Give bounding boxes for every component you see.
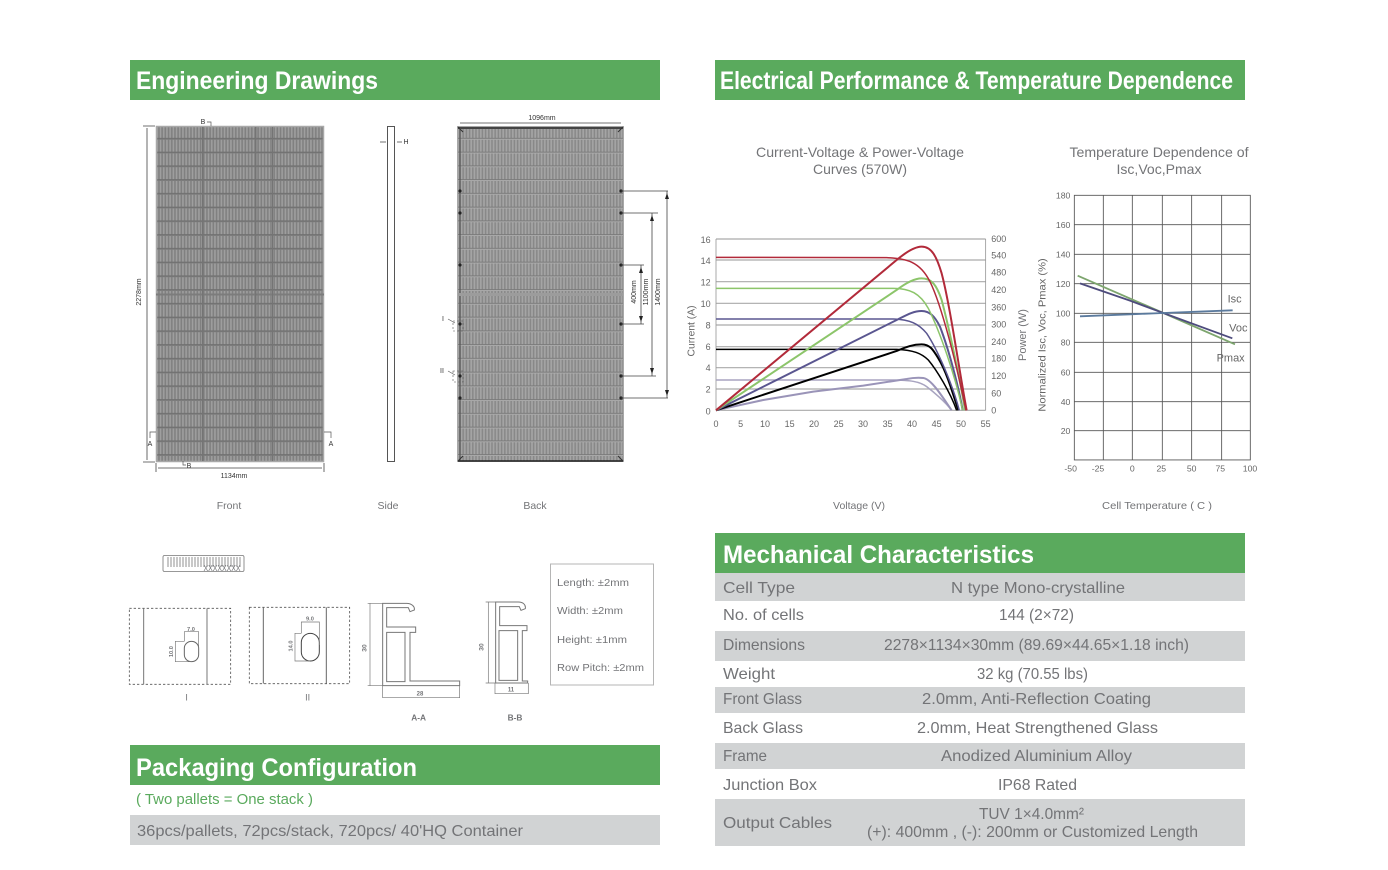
- line chart: I-V and P-V curves: 0: [991, 406, 996, 416]
- row: front glass: [715, 687, 1245, 713]
- heading: Engineering Drawings: [130, 60, 660, 100]
- drawing: frame section B-B: B-B: [508, 712, 522, 722]
- line chart: I-V and P-V curves: Current (A): [687, 305, 698, 357]
- drawing: side view of module: H: [403, 139, 409, 146]
- callout: tolerances: Length: ±2mm: [557, 577, 629, 589]
- row: junction box: [723, 777, 1077, 794]
- line chart: temperature dependence of Isc, Voc, Pmax: 25: [1156, 464, 1166, 474]
- drawing: back view of module: 1100mm: [643, 278, 650, 305]
- line chart: I-V and P-V curves: 2: [706, 385, 711, 395]
- axis label: Power (W): Power (W): [1017, 309, 1029, 361]
- line chart: temperature dependence of Isc, Voc, Pmax: 40: [1061, 397, 1071, 407]
- packaging details row: [130, 815, 660, 845]
- drawing: hole detail II: II: [305, 692, 310, 702]
- row: dimensions: [715, 631, 1245, 661]
- row: back glass: Back Glass: [723, 720, 803, 737]
- line chart: I-V and P-V curves: 16: [701, 235, 711, 245]
- line chart: I-V and P-V curves: 35: [883, 419, 893, 429]
- line chart: I-V and P-V curves: 10: [701, 299, 711, 309]
- line chart: temperature dependence of Isc, Voc, Pmax: 50: [1187, 464, 1197, 474]
- heading: Mechanical Characteristics: [715, 533, 1245, 573]
- line chart: temperature dependence of Isc, Voc, Pmax: [1037, 191, 1257, 474]
- axis label: Voltage (V): Voltage (V): [833, 500, 885, 512]
- line chart: temperature dependence of Isc, Voc, Pmax: Pmax: [1217, 352, 1245, 364]
- drawing: front view of module: A: [148, 441, 153, 448]
- view labels: Front, Side, Back: Front: [217, 500, 241, 512]
- line chart: I-V and P-V curves: 6: [706, 342, 711, 352]
- drawing: frame section A-A: [361, 603, 460, 722]
- chart title: current-voltage and power-voltage curves: Curves (570W): [813, 161, 907, 177]
- table: mechanical characteristics: [715, 573, 1245, 846]
- drawing: front view of module: B: [187, 463, 192, 470]
- line chart: temperature dependence of Isc, Voc, Pmax: -25: [1092, 464, 1104, 474]
- row: back glass: 2.0mm, Heat Strengthened Glass: [917, 720, 1158, 737]
- row: weight: [723, 666, 1088, 683]
- line chart: I-V and P-V curves: 40: [907, 419, 917, 429]
- drawing: back view of module: 1400mm: [655, 278, 662, 306]
- row: front glass: 2.0mm, Anti-Reflection Coating: [922, 691, 1151, 708]
- drawing: hole detail I: 7.0: [187, 627, 195, 633]
- drawing: junction strip detail: XXXXXXXX: [204, 564, 241, 573]
- drawing: junction strip detail: [163, 556, 244, 573]
- line chart: temperature dependence of Isc, Voc, Pmax: 140: [1056, 250, 1071, 260]
- line chart: temperature dependence of Isc, Voc, Pmax: 180: [1056, 191, 1071, 201]
- drawing: frame section B-B: [479, 602, 528, 722]
- line chart: I-V and P-V curves: 50: [956, 419, 966, 429]
- drawing: back view of module: [440, 115, 669, 462]
- line chart: I-V and P-V curves: 600: [991, 234, 1006, 244]
- line chart: temperature dependence of Isc, Voc, Pmax: 0: [1130, 464, 1135, 474]
- row: weight: Weight: [723, 666, 776, 683]
- view labels: Front, Side, Back: Back: [523, 500, 547, 512]
- drawing: front view of module: 1134mm: [221, 473, 248, 480]
- drawing: back view of module: 1096mm: [528, 115, 556, 122]
- drawing: hole detail I: 10.0: [169, 646, 175, 657]
- line chart: temperature dependence of Isc, Voc, Pmax: Voc: [1229, 322, 1248, 334]
- line chart: I-V and P-V curves: 5: [738, 419, 743, 429]
- line chart: I-V and P-V curves: 360: [991, 303, 1006, 313]
- drawing: side view of module: [380, 126, 409, 462]
- callout: tolerances: [550, 564, 654, 685]
- view labels: Front, Side, Back: [217, 500, 547, 512]
- line chart: I-V and P-V curves: 0: [706, 406, 711, 416]
- line chart: I-V and P-V curves: 55: [981, 419, 991, 429]
- line chart: I-V and P-V curves: 4: [706, 363, 711, 373]
- chart title: temperature dependence: Isc,Voc,Pmax: [1116, 161, 1202, 177]
- line chart: I-V and P-V curves: 12: [701, 277, 711, 287]
- line chart: I-V and P-V curves: 8: [706, 320, 711, 330]
- drawing: back view of module: I: [442, 316, 444, 323]
- drawing: hole detail I: [129, 608, 231, 702]
- line chart: temperature dependence of Isc, Voc, Pmax: 60: [1061, 368, 1071, 378]
- chart title: current-voltage and power-voltage curves: Current-Voltage & Power-Voltage: [756, 144, 964, 160]
- row: output cables: [715, 799, 1245, 846]
- drawing: frame section A-A: 30: [361, 644, 368, 652]
- text: two pallets note: ( Two pallets = One stack ): [136, 792, 313, 808]
- row: junction box: IP68 Rated: [998, 777, 1077, 794]
- line chart: I-V and P-V curves: 60: [991, 388, 1001, 398]
- line chart: I-V and P-V curves: 480: [991, 268, 1006, 278]
- line chart: I-V and P-V curves: 15: [785, 419, 795, 429]
- drawing: hole detail I: I: [185, 692, 188, 702]
- row: junction box: Junction Box: [723, 777, 817, 794]
- drawing: back view of module: II: [440, 368, 444, 375]
- line chart: temperature dependence of Isc, Voc, Pmax: 20: [1061, 426, 1071, 436]
- row: output cables: Output Cables: [723, 815, 832, 832]
- drawing: frame section A-A: A-A: [411, 712, 426, 722]
- callout: tolerances: Height: ±1mm: [557, 634, 627, 646]
- line chart: temperature dependence of Isc, Voc, Pmax: 100: [1056, 309, 1071, 319]
- row: dimensions: Dimensions: [723, 637, 805, 654]
- line chart: temperature dependence of Isc, Voc, Pmax: -50: [1064, 464, 1077, 474]
- drawing: hole detail II: 9.0: [306, 617, 314, 623]
- chart title: temperature dependence: [1070, 144, 1249, 177]
- heading: Electrical Performance & Temperature Dependence: [715, 60, 1245, 100]
- row: output cables: (+): 400mm , (-): 200mm or Customized Length: [867, 824, 1198, 841]
- row: back glass: [723, 720, 1158, 737]
- line chart: temperature dependence of Isc, Voc, Pmax: 100: [1243, 464, 1257, 474]
- packaging details row: 36pcs/pallets, 72pcs/stack, 720pcs/ 40'HQ Container: [137, 823, 524, 840]
- line chart: temperature dependence of Isc, Voc, Pmax: 120: [1056, 279, 1071, 289]
- line chart: I-V and P-V curves: 25: [834, 419, 844, 429]
- line chart: I-V and P-V curves: 540: [991, 250, 1006, 260]
- axis label: Cell Temperature: Cell Temperature ( C ): [1102, 500, 1212, 512]
- row: frame: [715, 743, 1245, 769]
- line chart: temperature dependence of Isc, Voc, Pmax: 160: [1056, 220, 1071, 230]
- chart title: temperature dependence: Temperature Dependence of: [1070, 144, 1249, 160]
- line chart: I-V and P-V curves: 14: [701, 256, 711, 266]
- line chart: I-V and P-V curves: 30: [858, 419, 868, 429]
- row: cell type: Cell Type: [723, 580, 795, 597]
- row: frame: Anodized Aluminium Alloy: [941, 748, 1132, 765]
- line chart: I-V and P-V curves: 300: [991, 320, 1006, 330]
- heading: Electrical Performance & Temperature Dependence: Electrical Performance & Temperature Dependence: [720, 67, 1233, 95]
- drawing: front view of module: 2278mm: [136, 278, 143, 306]
- line chart: I-V and P-V curves: 120: [991, 371, 1006, 381]
- line chart: I-V and P-V curves: 20: [809, 419, 819, 429]
- line chart: I-V and P-V curves: 420: [991, 285, 1006, 295]
- row: frame: Frame: [723, 748, 767, 765]
- drawing: front view of module: B: [201, 119, 206, 126]
- row: number of cells: [723, 607, 1074, 624]
- heading: Mechanical Characteristics: Mechanical Characteristics: [723, 541, 1034, 569]
- line chart: I-V and P-V curves: 240: [991, 337, 1006, 347]
- heading: Engineering Drawings: Engineering Drawings: [136, 67, 378, 95]
- line chart: I-V and P-V curves: 10: [760, 419, 770, 429]
- row: number of cells: 144 (2×72): [999, 607, 1074, 624]
- drawing: front view of module: [136, 119, 334, 480]
- row: number of cells: No. of cells: [723, 607, 804, 624]
- chart title: current-voltage and power-voltage curves: [756, 144, 964, 177]
- line chart: temperature dependence of Isc, Voc, Pmax: 80: [1061, 338, 1071, 348]
- line chart: temperature dependence of Isc, Voc, Pmax: Normalized Isc, Voc, Pmax (%): [1037, 258, 1048, 412]
- view labels: Front, Side, Back: Side: [377, 500, 399, 512]
- line chart: I-V and P-V curves: 180: [991, 354, 1006, 364]
- line chart: I-V and P-V curves: 0: [713, 419, 718, 429]
- drawing: back view of module: 400mm: [631, 280, 638, 304]
- row: output cables: TUV 1×4.0mm²: [979, 806, 1085, 823]
- drawing: hole detail II: 14.0: [288, 640, 294, 651]
- callout: tolerances: Width: ±2mm: [557, 605, 623, 617]
- drawing: frame section A-A: 28: [417, 692, 424, 698]
- line chart: I-V and P-V curves: [687, 234, 1006, 429]
- heading: Packaging Configuration: [130, 745, 660, 785]
- line chart: temperature dependence of Isc, Voc, Pmax: Isc: [1228, 293, 1242, 305]
- heading: Packaging Configuration: Packaging Configuration: [136, 754, 417, 782]
- drawing: hole detail II: [249, 607, 350, 702]
- line chart: I-V and P-V curves: 45: [932, 419, 942, 429]
- drawing: front view of module: A: [329, 441, 334, 448]
- callout: tolerances: Row Pitch: ±2mm: [557, 662, 644, 674]
- drawing: frame section B-B: 11: [508, 688, 515, 694]
- row: cell type: N type Mono-crystalline: [951, 580, 1125, 597]
- line chart: temperature dependence of Isc, Voc, Pmax: 75: [1215, 464, 1225, 474]
- row: cell type: [715, 573, 1245, 601]
- row: dimensions: 2278×1134×30mm (89.69×44.65×1.18 inch): [884, 637, 1189, 654]
- row: front glass: Front Glass: [723, 691, 802, 708]
- row: weight: 32 kg (70.55 lbs): [977, 666, 1088, 683]
- drawing: frame section B-B: 30: [479, 643, 486, 651]
